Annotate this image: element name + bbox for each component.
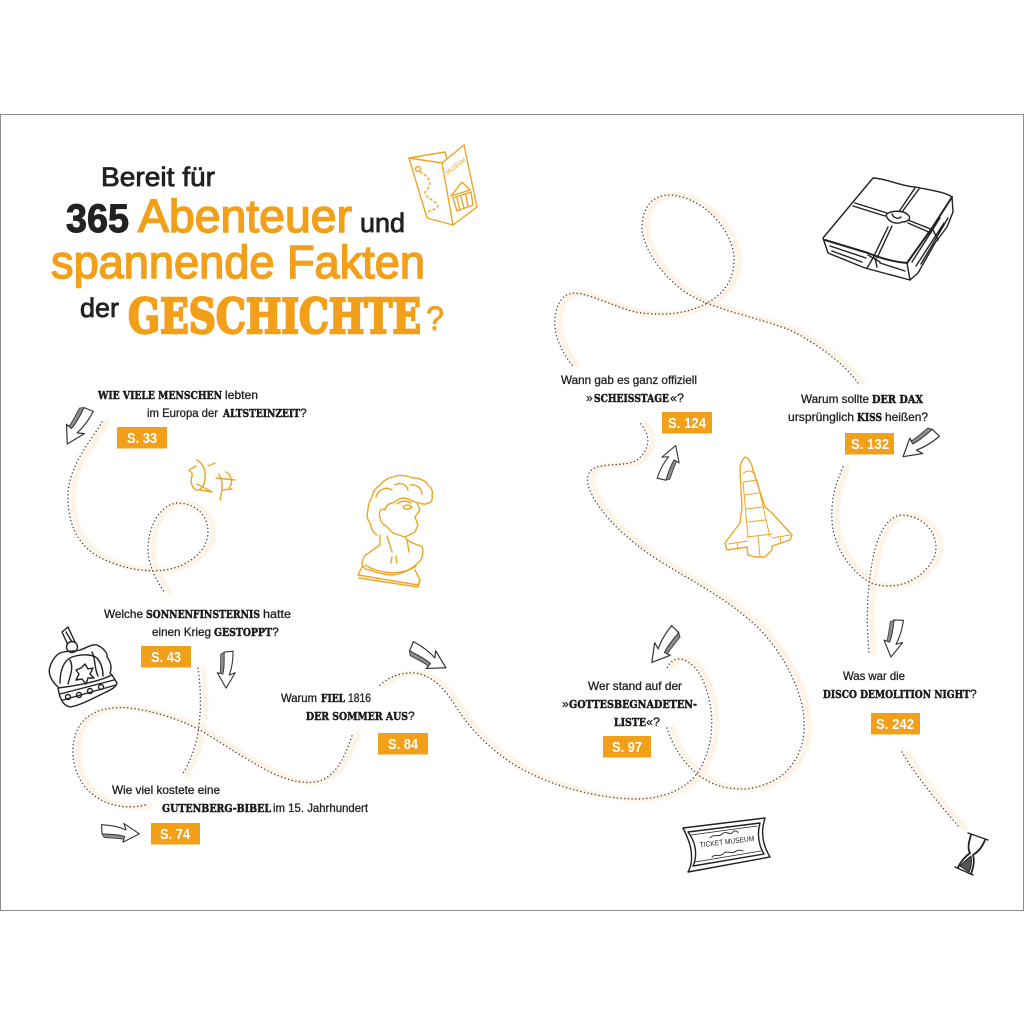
question: S. 242: DISCO DEMOLITION NIGHT [823,688,971,701]
question: S. 242: ? [970,687,977,701]
question: S. 84: DER SOMMER AUS [306,710,408,723]
question: S. 242 [823,669,977,734]
question: S. 43: GESTOPPT [214,626,273,639]
icon: museum ticket [683,818,770,872]
question: S. 43: hatte [263,607,291,621]
question: S. 33: ALTSTEINZEIT [222,407,301,420]
question: S. 43 [104,607,291,668]
question: S. 74: S. 74 [160,827,190,843]
question: S. 33: im Europa der [147,406,218,420]
icon: museum map [409,145,477,225]
question: S. 74: Wie viel kostete eine [112,783,220,797]
question: S. 33 [97,388,307,448]
arrow: to S. 242 [883,620,903,657]
title: Bereit für [101,162,215,192]
question: S. 33: S. 33 [127,431,157,447]
question: S. 84: FIEL [321,692,345,705]
arrow: to S. 97 [643,626,686,668]
question: S. 132: heißen? [885,410,928,424]
question: S. 43: S. 43 [151,650,181,666]
question: S. 33: ? [300,406,307,420]
icon: crown [49,627,117,707]
question: S. 242: S. 242 [876,717,914,733]
question: S. 74: im 15. Jahrhundert [273,801,369,815]
question: S. 132: KISS [857,411,882,424]
icon: hourglass [955,833,988,875]
question: S. 43: ? [272,625,279,639]
arrow: to S. 74 [102,823,140,843]
question: S. 84: 1816 [348,691,371,705]
question: S. 132: ursprünglich [788,410,854,424]
icon: space shuttle [725,457,792,557]
question: S. 124: «? [670,391,684,405]
question: S. 124: » [586,391,593,405]
question: S. 97: S. 97 [612,740,642,756]
question: S. 43: einen Krieg [152,625,211,639]
dotted route glow [73,195,965,828]
title: GESCHICHTE [128,289,421,345]
icon: David bust [358,475,432,587]
question: S. 97: LISTE [614,716,646,729]
question: S. 74: GUTENBERG-BIBEL [162,802,271,815]
question: S. 33: lebten [225,388,258,402]
title: 365 [66,197,129,241]
question: S. 132: S. 132 [851,437,889,453]
question: S. 124 [561,373,712,434]
dotted route [68,195,960,828]
question: S. 43: SONNENFINSTERNIS [146,608,260,621]
question: S. 74 [112,783,369,844]
question: S. 84 [281,691,428,754]
question: S. 97: «? [646,715,660,729]
title: ? [426,300,444,338]
question: S. 132 [788,392,928,454]
question: S. 33: WIE VIELE MENSCHEN [97,389,222,402]
question: S. 124: S. 124 [668,416,706,432]
title [51,162,444,345]
question: S. 124: SCHEISSTAGE [594,392,669,405]
question: S. 242: Was war die [843,669,905,683]
arrow: to S. 124 [657,443,683,482]
arrow: to S. 84 route [406,642,450,675]
title: und [360,208,405,238]
question: S. 124: Wann gab es ganz offiziell [561,373,697,387]
title: Abenteuer [138,190,352,242]
icon: museum ticket: TICKET MUSEUM [699,834,755,849]
arrow: to S. 33 [60,404,93,448]
question: S. 84: ? [408,709,415,723]
question: S. 97: » [562,697,569,711]
question: S. 97: Wer stand auf der [588,679,682,693]
question: S. 97 [562,679,697,758]
question: S. 97: GOTTESBEGNADETEN- [569,698,697,711]
icon: cave painting figures [189,460,235,500]
icon: sealed book [823,178,953,280]
question: S. 84: S. 84 [388,737,418,753]
icon: museum map: MUSEUM [445,157,467,177]
title: spannende Fakten [51,236,425,288]
question: S. 43: Welche [104,607,143,621]
question: S. 132: Warum sollte [801,392,869,406]
arrow: to S. 132 [897,422,939,465]
question: S. 84: Warum [281,691,317,705]
title: der [80,293,119,323]
arrow: to S. 43 [215,651,237,689]
question: S. 132: DER DAX [872,393,923,406]
